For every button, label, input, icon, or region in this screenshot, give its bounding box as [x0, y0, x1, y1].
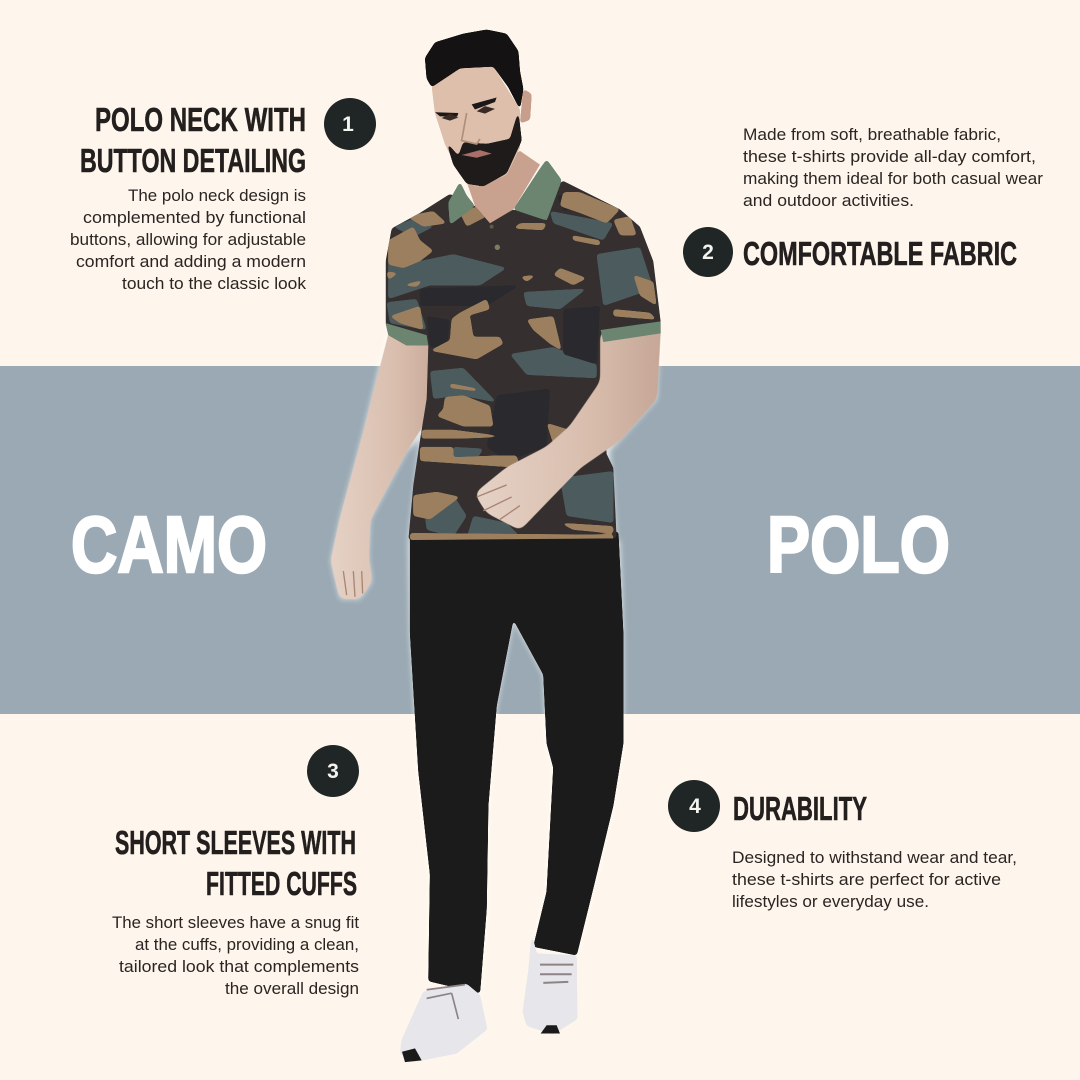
body text 1: touch to the classic look — [122, 275, 307, 293]
heading 3: FITTED CUFFS — [206, 865, 357, 902]
halo around torso and arms — [331, 335, 660, 599]
right collar — [513, 159, 562, 220]
eyes — [442, 106, 495, 121]
body text 3: The short sleeves have a snug fit — [112, 914, 359, 932]
figure: man wearing camo polo — [331, 30, 663, 1062]
neck — [467, 151, 540, 225]
body text 4: Designed to withstand wear and tear, — [732, 849, 1017, 867]
body text 1: buttons, allowing for adjustable — [70, 231, 306, 249]
nose — [462, 113, 480, 144]
callout 4: durability — [668, 780, 1017, 911]
left sleeve cuff — [386, 323, 428, 345]
upper body — [331, 30, 663, 599]
placket buttons — [490, 225, 500, 250]
body text 3 — [112, 914, 359, 998]
heading 1 — [80, 101, 306, 179]
number badge 1 — [324, 98, 376, 150]
body text 4: these t-shirts are perfect for active — [732, 871, 1001, 889]
halo around trousers — [408, 540, 623, 993]
beard — [447, 111, 522, 186]
title word: POLO: POLO — [767, 500, 950, 589]
trousers — [410, 532, 623, 993]
number badge 3: 3 — [327, 760, 339, 783]
title word: CAMO: CAMO — [71, 500, 267, 589]
ear — [520, 89, 532, 123]
body text 1: complemented by functional — [83, 209, 306, 227]
right arm and hand — [475, 324, 661, 530]
number badge 2 — [683, 227, 733, 277]
eyebrows — [435, 97, 497, 116]
finger lines — [477, 485, 520, 519]
heading 1: BUTTON DETAILING — [80, 142, 306, 179]
body text 3: at the cuffs, providing a clean, — [135, 936, 359, 954]
body text 2: Made from soft, breathable fabric, — [743, 126, 1001, 144]
right shoe — [523, 933, 577, 1035]
body text 2: these t-shirts provide all-day comfort, — [743, 148, 1036, 166]
body text 2: making them ideal for both casual wear — [743, 170, 1044, 188]
number badge 2: 2 — [702, 241, 714, 264]
number badge 3 — [307, 745, 359, 797]
left arm and hand — [331, 323, 440, 599]
body text 2 — [743, 126, 1044, 210]
heading 4: DURABILITY — [733, 790, 867, 827]
grey horizontal band — [0, 366, 1080, 714]
number badge 4 — [668, 780, 720, 832]
left hand fingers — [343, 571, 363, 597]
mouth — [462, 150, 492, 158]
right sleeve cuff — [601, 321, 661, 342]
body text 3: the overall design — [225, 980, 359, 998]
number badge 4: 4 — [689, 795, 701, 818]
callout 2: comfortable fabric — [683, 126, 1044, 277]
trousers and shoes — [400, 532, 623, 1062]
body text 4: lifestyles or everyday use. — [732, 893, 929, 911]
body text 2: and outdoor activities. — [743, 192, 914, 210]
heading 1: POLO NECK WITH — [95, 101, 306, 138]
left shoe — [400, 984, 487, 1062]
body text 1 — [70, 187, 307, 293]
callout 1: polo neck — [70, 98, 376, 293]
body text 1: comfort and adding a modern — [76, 253, 306, 271]
number badge 1: 1 — [342, 113, 354, 136]
callout 3: short sleeves — [112, 745, 359, 998]
polo shirt with camouflage — [383, 175, 663, 543]
hair — [425, 30, 523, 110]
body text 3: tailored look that complements — [119, 958, 359, 976]
heading 3: SHORT SLEEVES WITH — [115, 824, 356, 861]
body text 4 — [732, 849, 1017, 911]
body text 1: The polo neck design is — [128, 187, 306, 205]
face — [432, 66, 520, 187]
left collar — [448, 182, 475, 225]
heading 3 — [115, 824, 357, 902]
